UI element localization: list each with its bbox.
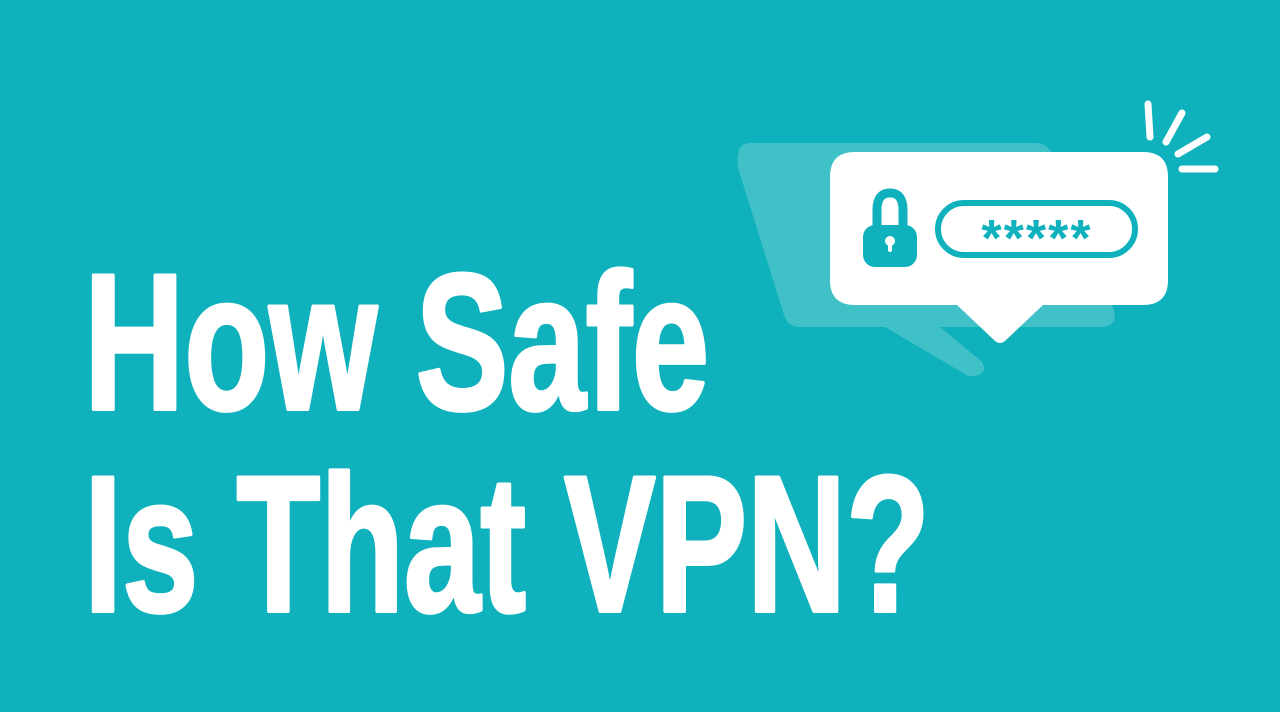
title: How Safe xyxy=(84,233,709,450)
password field: ***** xyxy=(981,210,1093,268)
icon: lock xyxy=(863,193,917,267)
icon: alert rays xyxy=(1148,104,1215,169)
back bubble shape xyxy=(738,143,1115,376)
title: Is That VPN? xyxy=(84,435,930,653)
main bubble xyxy=(830,152,1168,343)
title xyxy=(84,233,930,653)
password field xyxy=(938,203,1135,268)
